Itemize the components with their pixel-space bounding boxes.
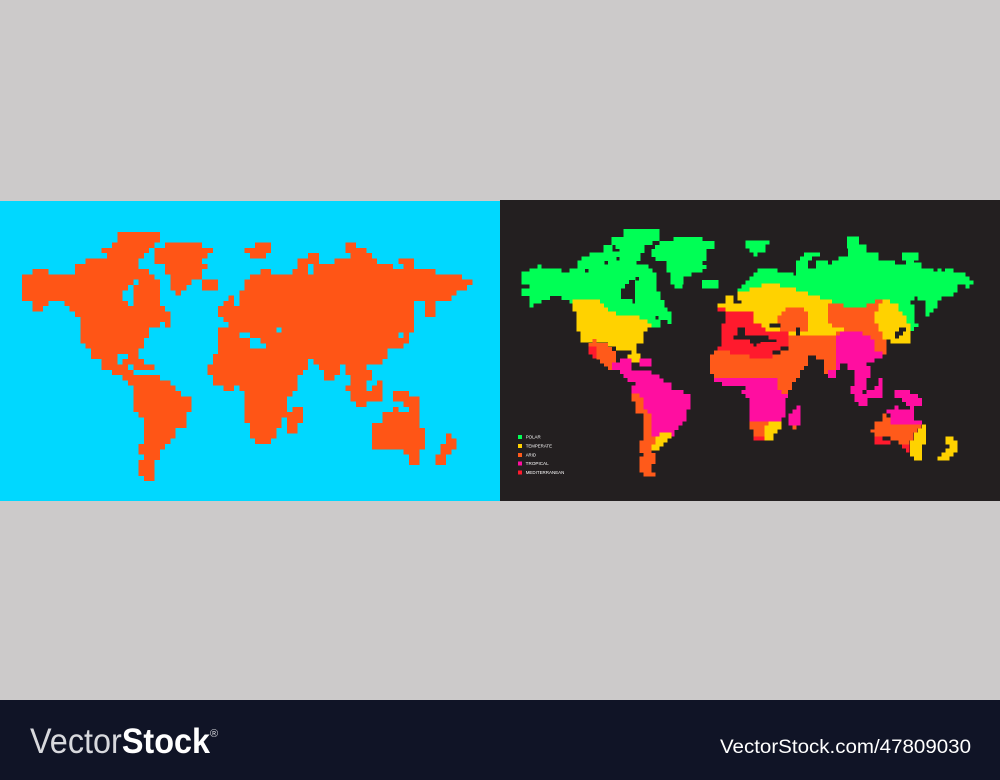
legend item: arid: ARID bbox=[526, 453, 537, 458]
map: orange pixel world bbox=[22, 232, 473, 481]
detail: Hudson Bay bbox=[621, 280, 635, 303]
region: mediterranean Australia bbox=[875, 437, 909, 453]
region: temperate East Asia bbox=[875, 299, 911, 343]
region: arid Andes bbox=[631, 394, 655, 476]
map: climate zones Old World bbox=[710, 237, 973, 461]
map: climate zones Americas bbox=[522, 229, 718, 476]
region: mediterranean Cape bbox=[753, 437, 765, 441]
region: tropical Latin America bbox=[612, 358, 691, 437]
region: temperate Europe and Central Asia bbox=[717, 284, 844, 335]
detail: arctic gaps bbox=[585, 245, 659, 319]
detail: strait gap bbox=[863, 390, 867, 394]
region: arid Madagascar tip bbox=[793, 425, 797, 429]
panel: dark climate map bbox=[500, 200, 1000, 501]
panel: blue world map bbox=[0, 201, 500, 501]
legend item: polar: POLAR bbox=[526, 435, 541, 440]
legend item: mediterranean: MEDITERRANEAN bbox=[526, 470, 564, 475]
detail: inland seas bbox=[769, 323, 800, 335]
region: mediterranean North Africa and Europe bbox=[717, 307, 788, 359]
region: arid Africa and Middle East bbox=[710, 299, 887, 394]
footer logo: ® bbox=[210, 728, 218, 740]
region: temperate eastern Australia bbox=[910, 425, 926, 461]
detail: Korea gap bbox=[895, 327, 906, 339]
region: arid Mexico bbox=[588, 339, 616, 370]
footer image id: VectorStock.com/47809030 bbox=[720, 737, 971, 758]
region: temperate Argentina bbox=[651, 433, 671, 451]
region: tropical Madagascar bbox=[789, 405, 801, 425]
footer logo: VectorStock bbox=[30, 722, 210, 761]
region: tropical Indonesia bbox=[895, 390, 922, 411]
region: arid Australia bbox=[871, 413, 921, 449]
region: arid Central Asia blob bbox=[777, 307, 808, 331]
region: polar Svalbard bbox=[745, 241, 769, 257]
region: temperate North America bbox=[573, 299, 651, 362]
region: temperate New Zealand bbox=[937, 437, 957, 461]
region: polar North America bbox=[522, 229, 671, 327]
landmass: Eurasia, Africa and Oceania bbox=[208, 243, 473, 465]
region: polar Eurasia bbox=[737, 237, 973, 331]
region: polar Greenland and Iceland bbox=[651, 237, 718, 288]
region: tropical South and Southeast Asia bbox=[828, 331, 883, 406]
region: mediterranean California bbox=[588, 346, 596, 358]
region: temperate southern Africa bbox=[765, 421, 781, 441]
region: arid southern Africa bbox=[749, 421, 769, 437]
region: tropical Africa bbox=[714, 378, 788, 421]
detail: Mediterranean Sea bbox=[733, 327, 777, 347]
legend item: tropical: TROPICAL bbox=[526, 461, 549, 466]
landmass: Americas and Greenland bbox=[22, 232, 218, 481]
footer bar bbox=[0, 700, 1000, 780]
region: tropical northern Australia bbox=[887, 405, 922, 425]
legend item: temperate: TEMPERATE bbox=[526, 444, 552, 449]
legend bbox=[518, 435, 564, 475]
